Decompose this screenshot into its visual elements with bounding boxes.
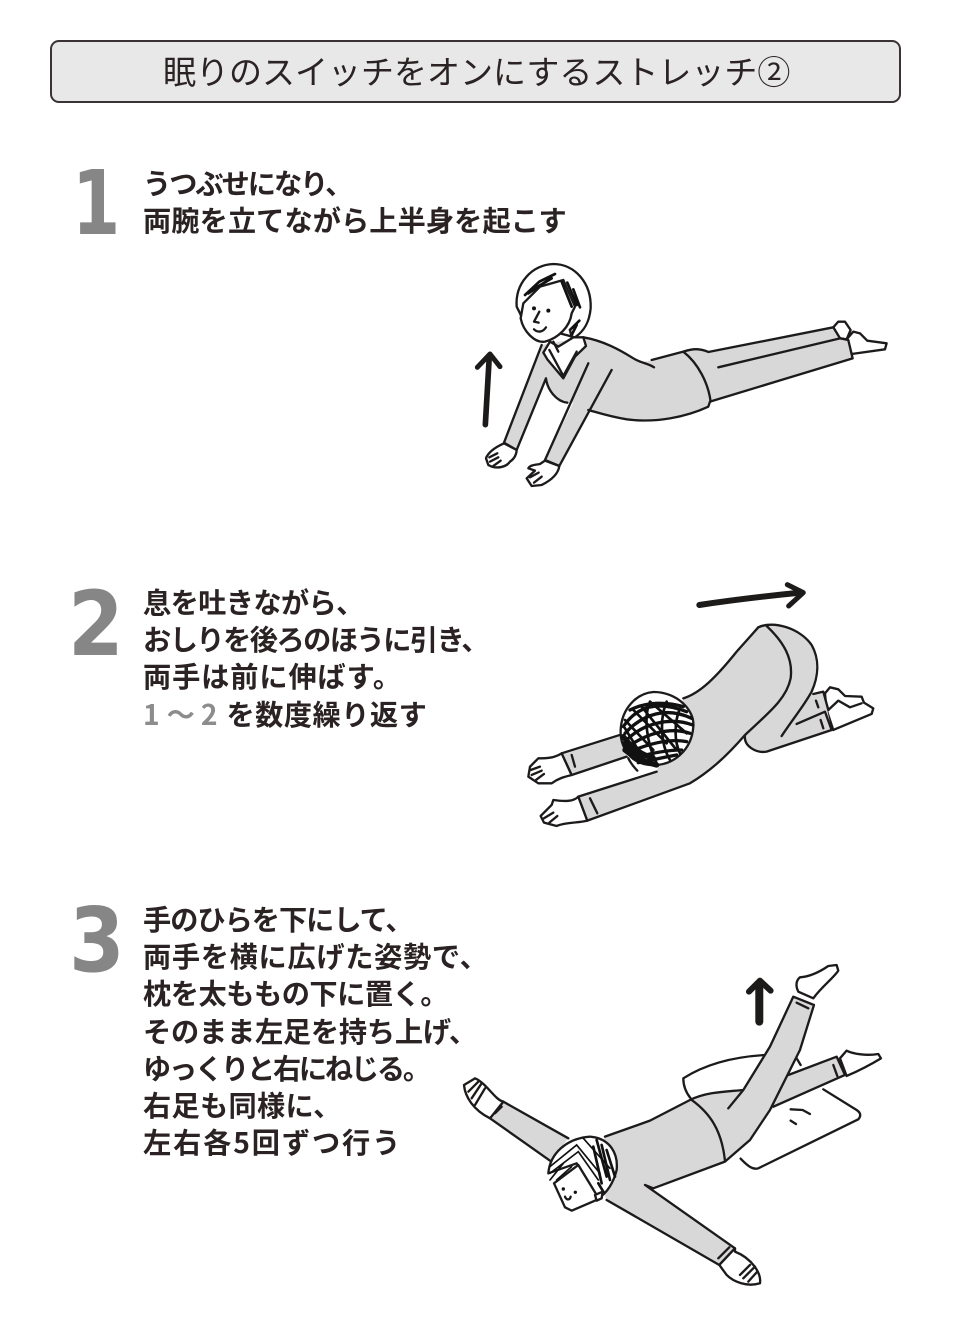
step 3 text: 左右各5回ずつ行う (143, 1121, 402, 1162)
step 3 text: 右足も同様に、 (143, 1084, 342, 1125)
hands (464, 1078, 503, 1118)
hair back (517, 264, 591, 342)
step 3 text: 両手を横に広げた姿勢で、 (143, 935, 489, 976)
step 1 text (143, 162, 567, 240)
step 2 text: おしりを後ろのほうに引き、 (143, 618, 488, 659)
step 1 number: 1 (72, 151, 120, 255)
title box (50, 40, 901, 103)
title banner (50, 40, 901, 103)
title text: 眠りのスイッチをオンにするストレッチ② (163, 46, 790, 94)
feet (796, 965, 838, 998)
icon: up arrow step 3 (749, 981, 771, 1022)
hands (528, 753, 572, 783)
collar (543, 337, 586, 378)
step 3 text: 手のひらを下にして、 (143, 898, 413, 939)
step 3 text: そのまま左足を持ち上げ、 (143, 1010, 477, 1051)
step 2 text: 息を吐きながら、 (143, 581, 364, 622)
face (521, 280, 575, 342)
hair scribble (621, 692, 693, 765)
torso, raised leg, arm (593, 997, 814, 1265)
body (578, 625, 817, 821)
step 3 text: ゆっくりと右にねじる。 (143, 1047, 429, 1088)
step 1 text: 両腕を立てながら上半身を起こす (143, 199, 567, 240)
step 3 text: 枕を太ももの下に置く。 (143, 972, 448, 1013)
icon: up arrow step 1 (477, 354, 500, 425)
step 2 text: 両手は前に伸ばす。 (143, 655, 402, 696)
pillow (683, 1055, 860, 1169)
icon: right arrow step 2 (699, 585, 803, 606)
step 3 text (143, 898, 489, 1162)
figure 1 (486, 264, 887, 486)
step 1 text: うつぶせになり、 (143, 162, 351, 203)
legs (745, 692, 832, 752)
left arm (490, 1102, 568, 1161)
upper arm (562, 733, 627, 775)
hair (548, 1137, 617, 1198)
step 2 number: 2 (68, 572, 124, 676)
lower leg (770, 1057, 845, 1110)
figure 3 (464, 965, 881, 1285)
feet (825, 687, 873, 730)
hands (486, 443, 517, 467)
step 3 number: 3 (69, 888, 125, 992)
step 2 text: 1～2 を数度繰り返す (143, 693, 427, 734)
step 2 text (143, 581, 488, 734)
face (554, 1165, 597, 1211)
figure 2 (528, 625, 873, 826)
